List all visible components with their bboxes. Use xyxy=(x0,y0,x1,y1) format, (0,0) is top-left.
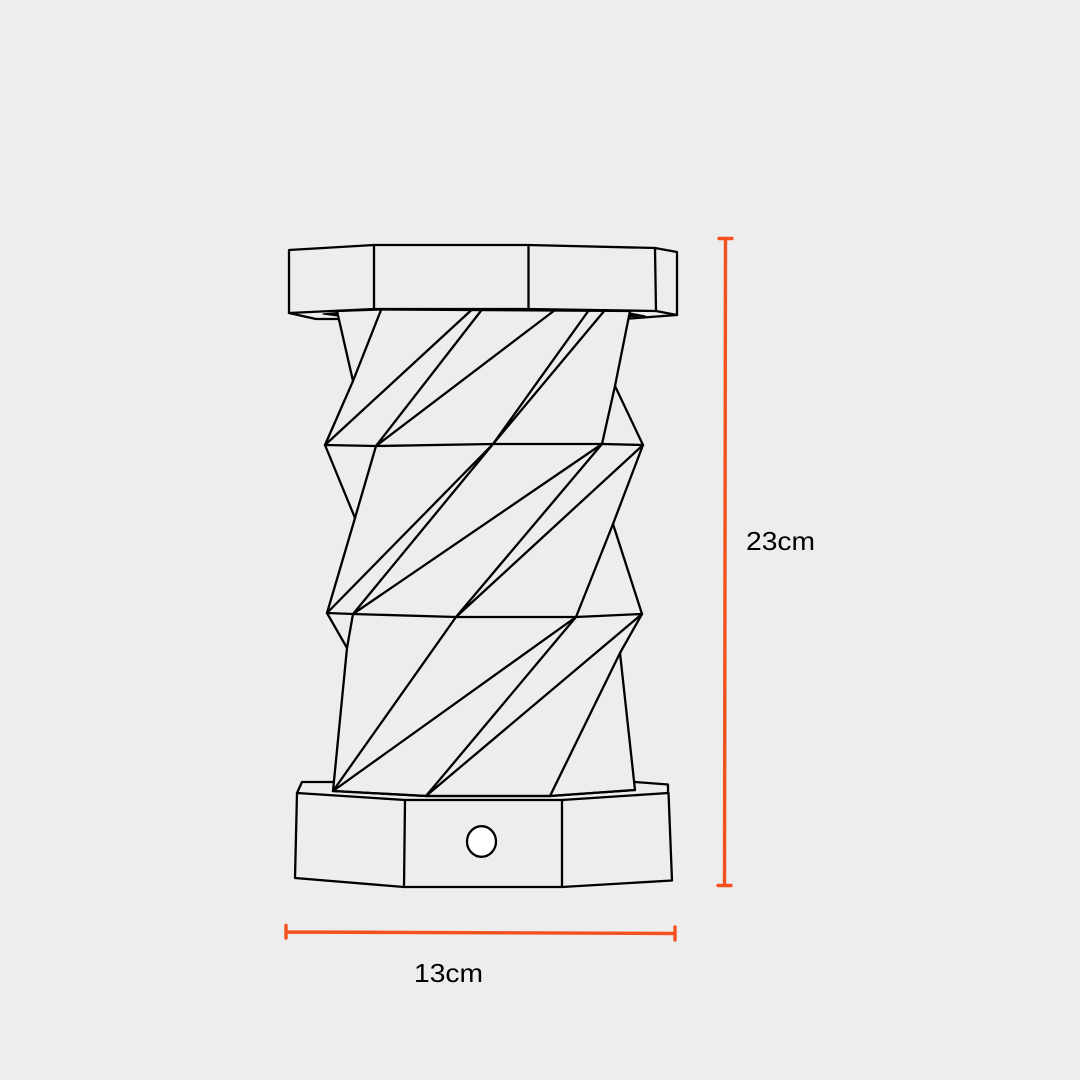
width label: 13cm xyxy=(414,958,483,988)
faceted object line drawing xyxy=(289,245,677,887)
top cap xyxy=(289,245,677,319)
height dimension arrow xyxy=(718,238,732,886)
faceted column xyxy=(325,310,643,796)
width dimension arrow xyxy=(286,926,675,940)
base xyxy=(295,782,672,887)
height label: 23cm xyxy=(746,526,815,556)
base hole xyxy=(467,826,496,857)
